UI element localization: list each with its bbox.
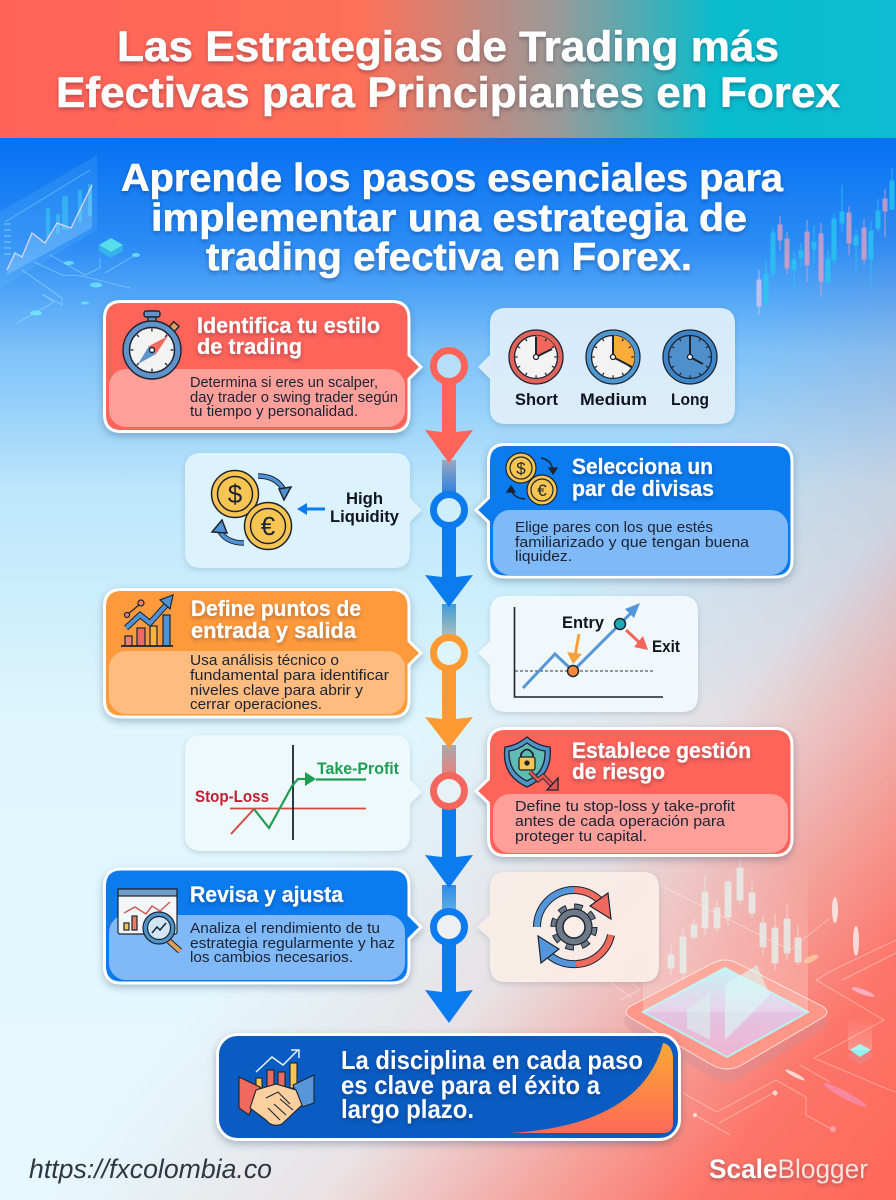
node 2: [434, 494, 464, 526]
labels: [562, 613, 680, 656]
text block: fundamental para identificar: [190, 668, 389, 684]
icon: mini coins: $: [516, 459, 526, 478]
chart: axes and price line: [514, 603, 663, 697]
timeline connectors: [442, 460, 456, 911]
arrow: to coins: [297, 503, 325, 515]
header banner: [0, 0, 896, 138]
icon: mini coins: [506, 453, 557, 505]
heading: Selecciona un: [572, 454, 713, 479]
text block: proteger tu capital.: [515, 829, 647, 845]
panel: entry exit chart: [478, 596, 698, 712]
arrow 4: [425, 806, 473, 888]
icon: stopwatch: [123, 311, 181, 379]
icon: analytics review: [118, 889, 180, 951]
heading: Establece gestión: [572, 738, 751, 763]
icon: shield lock: [504, 737, 558, 790]
icon: growth chart: [121, 595, 173, 646]
heading: [572, 454, 714, 501]
heading: de riesgo: [572, 759, 665, 784]
heading: de trading: [197, 334, 302, 359]
labels: Stop-Loss: [195, 788, 269, 806]
text block: [190, 653, 389, 713]
labels: Entry: [562, 613, 605, 632]
decoration: right candlesticks: [757, 168, 894, 315]
node 5: [434, 912, 464, 942]
panel: time horizons: [478, 308, 735, 424]
labels: Long: [671, 390, 709, 409]
heading: entrada y salida: [191, 618, 357, 643]
chart: lines: [230, 745, 366, 840]
labels: Exit: [652, 637, 680, 656]
heading: [197, 313, 380, 359]
subtitle: [121, 157, 783, 279]
footer url: https://fxcolombia.co: [29, 1154, 272, 1184]
title: Efectivas para Principiantes en Forex: [56, 69, 840, 117]
panel: step 5 revisa: [104, 869, 421, 983]
heading: [572, 738, 751, 784]
icon: coins: [212, 470, 292, 550]
label: Liquidity: [330, 507, 400, 526]
text block: es clave para el éxito a: [341, 1070, 600, 1100]
icon: medium clock: [586, 330, 640, 384]
label: High: [346, 489, 383, 508]
icon: mini coins: €: [537, 481, 547, 500]
heading: Identifica tu estilo: [197, 313, 380, 338]
text block: Define tu stop-loss y take-profit: [515, 799, 735, 815]
label: [330, 489, 400, 526]
panel: stop loss take profit chart: [185, 735, 422, 851]
text block: [341, 1045, 643, 1124]
icon: short clock: [509, 330, 563, 384]
icon: cycle arrows and gear: [537, 890, 611, 964]
footer brand: ScaleBlogger: [709, 1154, 868, 1184]
labels: [515, 390, 709, 409]
panel: step 3 define: [104, 590, 421, 717]
node 3: [434, 638, 464, 668]
text block: Analiza el rendimiento de tu: [190, 921, 380, 937]
text block: [515, 520, 750, 565]
text block: antes de cada operación para: [515, 814, 726, 830]
subtitle: Aprende los pasos esenciales para: [121, 157, 783, 200]
text block: los cambios necesarios.: [190, 950, 353, 966]
decoration: left isometric chart: [0, 155, 140, 323]
panel: closing message: [218, 1034, 680, 1140]
title: [56, 23, 840, 117]
heading: Revisa y ajusta: [190, 882, 344, 907]
heading: Define puntos de: [191, 596, 361, 621]
arrow 1: [425, 380, 473, 463]
panel: step 2 selecciona: [476, 444, 792, 577]
icon: coins: €: [261, 511, 276, 541]
text block: [190, 375, 398, 420]
text block: largo plazo.: [341, 1094, 474, 1124]
labels: [195, 760, 399, 806]
arrow 2: [425, 525, 473, 607]
labels: Take-Profit: [317, 760, 399, 778]
icon: coins: $: [228, 479, 243, 509]
text block: estrategia regularmente y haz: [190, 936, 395, 952]
node 4: [434, 776, 464, 806]
text block: [190, 921, 395, 966]
text block: niveles clave para abrir y: [190, 683, 364, 699]
arrow 5: [425, 942, 473, 1023]
text block: familiarizado y que tengan buena: [515, 535, 750, 551]
labels: Short: [515, 390, 558, 409]
subtitle: implementar una estrategia de: [151, 197, 747, 240]
icon: handshake: [239, 1050, 314, 1125]
labels: Medium: [580, 390, 647, 409]
panel: step 1 identifica: [104, 302, 421, 432]
arrow 3: [425, 668, 473, 748]
text block: Usa análisis técnico o: [190, 653, 339, 669]
text block: Elige pares con los que estés: [515, 520, 713, 536]
heading: par de divisas: [572, 476, 714, 501]
panel: cycle gear: [477, 872, 659, 982]
text block: day trader o swing trader según: [190, 390, 398, 406]
text block: liquidez.: [515, 549, 572, 565]
panel: step 4 establece: [476, 728, 792, 856]
text block: cerrar operaciones.: [190, 697, 322, 713]
panel: high liquidity: [185, 453, 422, 568]
heading: [191, 596, 361, 643]
decorative swoosh: [510, 1043, 673, 1133]
text block: tu tiempo y personalidad.: [190, 404, 358, 420]
subtitle: trading efectiva en Forex.: [206, 236, 692, 279]
decoration: bottom right platform: [600, 860, 896, 1135]
node 1: [434, 350, 464, 382]
icon: long clock: [663, 330, 717, 384]
text block: Determina si eres un scalper,: [190, 375, 378, 391]
text block: La disciplina en cada paso: [341, 1045, 643, 1075]
title: Las Estrategias de Trading más: [117, 23, 779, 71]
text block: [515, 799, 735, 845]
